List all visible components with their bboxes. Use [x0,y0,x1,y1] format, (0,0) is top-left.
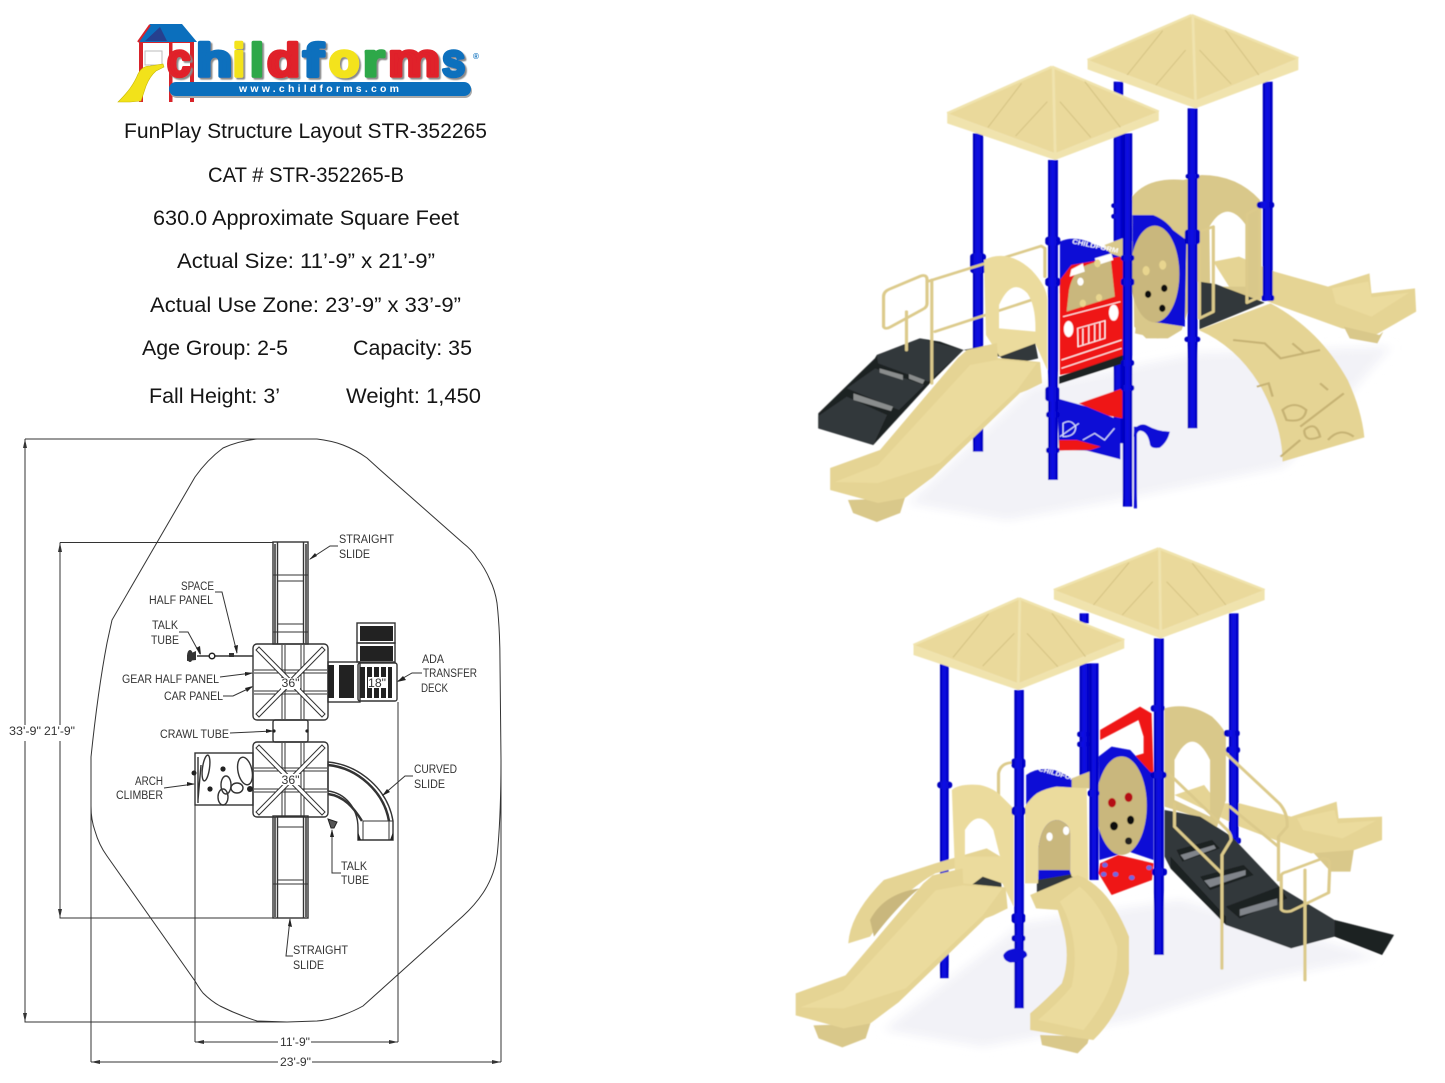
back rail panels [1199,207,1260,318]
back deck [1199,282,1265,329]
dimension labels: 21'-9" [44,726,75,738]
red car panel rear [1099,707,1154,895]
text block: structure specifications: Actual Size: 11’-9” x 21’-9” [177,250,435,273]
talk tube on pole [1003,948,1027,963]
text block: structure specifications: 630.0 Approximate Square Feet [153,207,459,230]
ADA transfer deck plan [328,623,397,702]
dimension arrows [23,439,501,1064]
url bar: www.childforms.com [238,83,399,95]
wordmark letters: i [233,35,245,86]
dimension labels: 23'-9" [280,1057,311,1069]
component labels [116,534,477,972]
component labels: TALK [152,620,178,632]
component labels: TUBE [151,635,179,647]
front poles [1012,663,1099,1008]
tan panel behind car [1105,238,1133,263]
front roof [914,598,1124,690]
left straight slide [830,343,1042,522]
left arch panel [952,785,1014,907]
talk tube plan upper [187,650,253,662]
text block: structure specifications: Fall Height: 3’ [149,385,280,408]
component labels: SLIDE [293,960,324,972]
registered mark: ® [473,52,479,61]
rear curved slide [848,848,1000,943]
back tower poles [1111,82,1274,443]
component labels: CAR PANEL [164,691,224,703]
component labels: TALK [341,861,367,873]
tower deck plan upper [253,644,328,720]
callout leaders [164,546,422,956]
left arch panel [984,256,1047,370]
ADA handrails [1169,753,1330,980]
wordmark letters: c [167,36,191,86]
ADA transfer deck plan: 18" [368,678,386,690]
3D render: structure view from stair side [796,548,1394,1053]
wordmark letters: l [250,36,264,87]
wordmark letters: f [303,35,324,86]
logo: childforms [118,24,479,102]
wordmark letters [167,34,465,87]
component labels: TUBE [341,875,369,887]
component labels: TRANSFER [423,668,477,680]
car panel [1059,237,1123,384]
component labels: ARCH [135,776,163,788]
text block: structure specifications [124,120,487,408]
dimension labels: 11'-9" [280,1037,310,1049]
wordmark letters: o [329,36,359,87]
dimension labels: 33'-9" [9,726,41,738]
front poles [1045,133,1134,507]
url bar [169,82,472,98]
text block: structure specifications: Actual Use Zone: 23’-9” x 33’-9” [150,294,461,317]
left deck [965,863,1002,898]
wordmark letters: h [196,35,233,86]
wordmark letters: s [442,35,465,86]
wordmark letters: r [363,34,384,86]
icon: play tower with slide [118,24,197,102]
component labels: SLIDE [339,549,370,561]
component labels: ADA [422,654,444,666]
tower deck plan lower: 36" [282,775,300,787]
tower deck plan lower [253,742,328,817]
front right arch panel with tube [1025,787,1088,897]
component labels: STRAIGHT [293,945,348,957]
blue childforms panel [1026,766,1088,880]
left tower rear pole [970,133,986,452]
crawl tube panel with holes [1130,215,1186,338]
ground shadow [884,900,1378,1047]
crawl tube plan [272,720,309,742]
handrails [884,246,1045,383]
talk tube plan lower [328,819,337,828]
component labels: SLIDE [414,779,445,791]
back arch panel [1132,175,1261,338]
component labels: CLIMBER [116,790,163,802]
component labels: SPACE [181,581,214,593]
car panel: CHILDFORM [1071,237,1120,255]
blue childforms panel: CHILDFORMS [1037,766,1088,786]
wordmark letters: m [388,35,440,86]
stairs and transfer deck [1165,810,1394,955]
back roof [1054,548,1265,638]
arch climber plan [192,753,255,805]
talk tube [1133,424,1170,508]
stairs [818,338,963,445]
back roof [1088,15,1298,108]
ground shadow [909,347,1391,520]
back straight slide [1213,257,1416,343]
back tower poles [1077,613,1241,955]
right arch panel [1165,706,1226,830]
left straight slide [796,868,1008,1047]
component labels: STRAIGHT [339,534,394,546]
component labels: GEAR HALF PANEL [122,674,220,686]
tower deck plan upper: 36" [282,678,300,690]
text block: structure specifications: Age Group: 2-5 [142,337,288,360]
plan drawing: site layout [9,439,501,1069]
tan panel behind front arch [1072,772,1089,788]
rear left rail [999,763,1011,795]
3D render: structure view from car panel side [818,15,1416,522]
top straight slide plan [273,542,308,644]
dimension labels [9,726,311,1069]
text block: structure specifications: Weight: 1,450 [346,385,481,408]
left deck [963,333,1038,365]
front curved slide [1030,875,1129,1053]
component labels: DECK [421,683,448,695]
bottom straight slide plan [273,816,308,918]
pole left rear [937,663,952,978]
crawl tube panel [1096,747,1154,860]
wordmark letters: d [267,34,300,86]
space half panel [1057,388,1122,459]
text block: structure specifications: CAT # STR-352265-B [208,164,404,187]
text block: structure specifications: FunPlay Structure Layout STR-352265 [124,120,487,143]
component labels: HALF PANEL [149,595,214,607]
text block: structure specifications: Capacity: 35 [353,337,472,360]
back right straight slide [1174,785,1382,872]
component labels: CRAWL TUBE [160,729,229,741]
component labels: CURVED [414,764,457,776]
use zone outline [91,439,501,1022]
curved slide plan [328,762,393,840]
arch climber [1199,303,1364,462]
dimension lines [25,439,501,1062]
front roof [947,67,1159,160]
